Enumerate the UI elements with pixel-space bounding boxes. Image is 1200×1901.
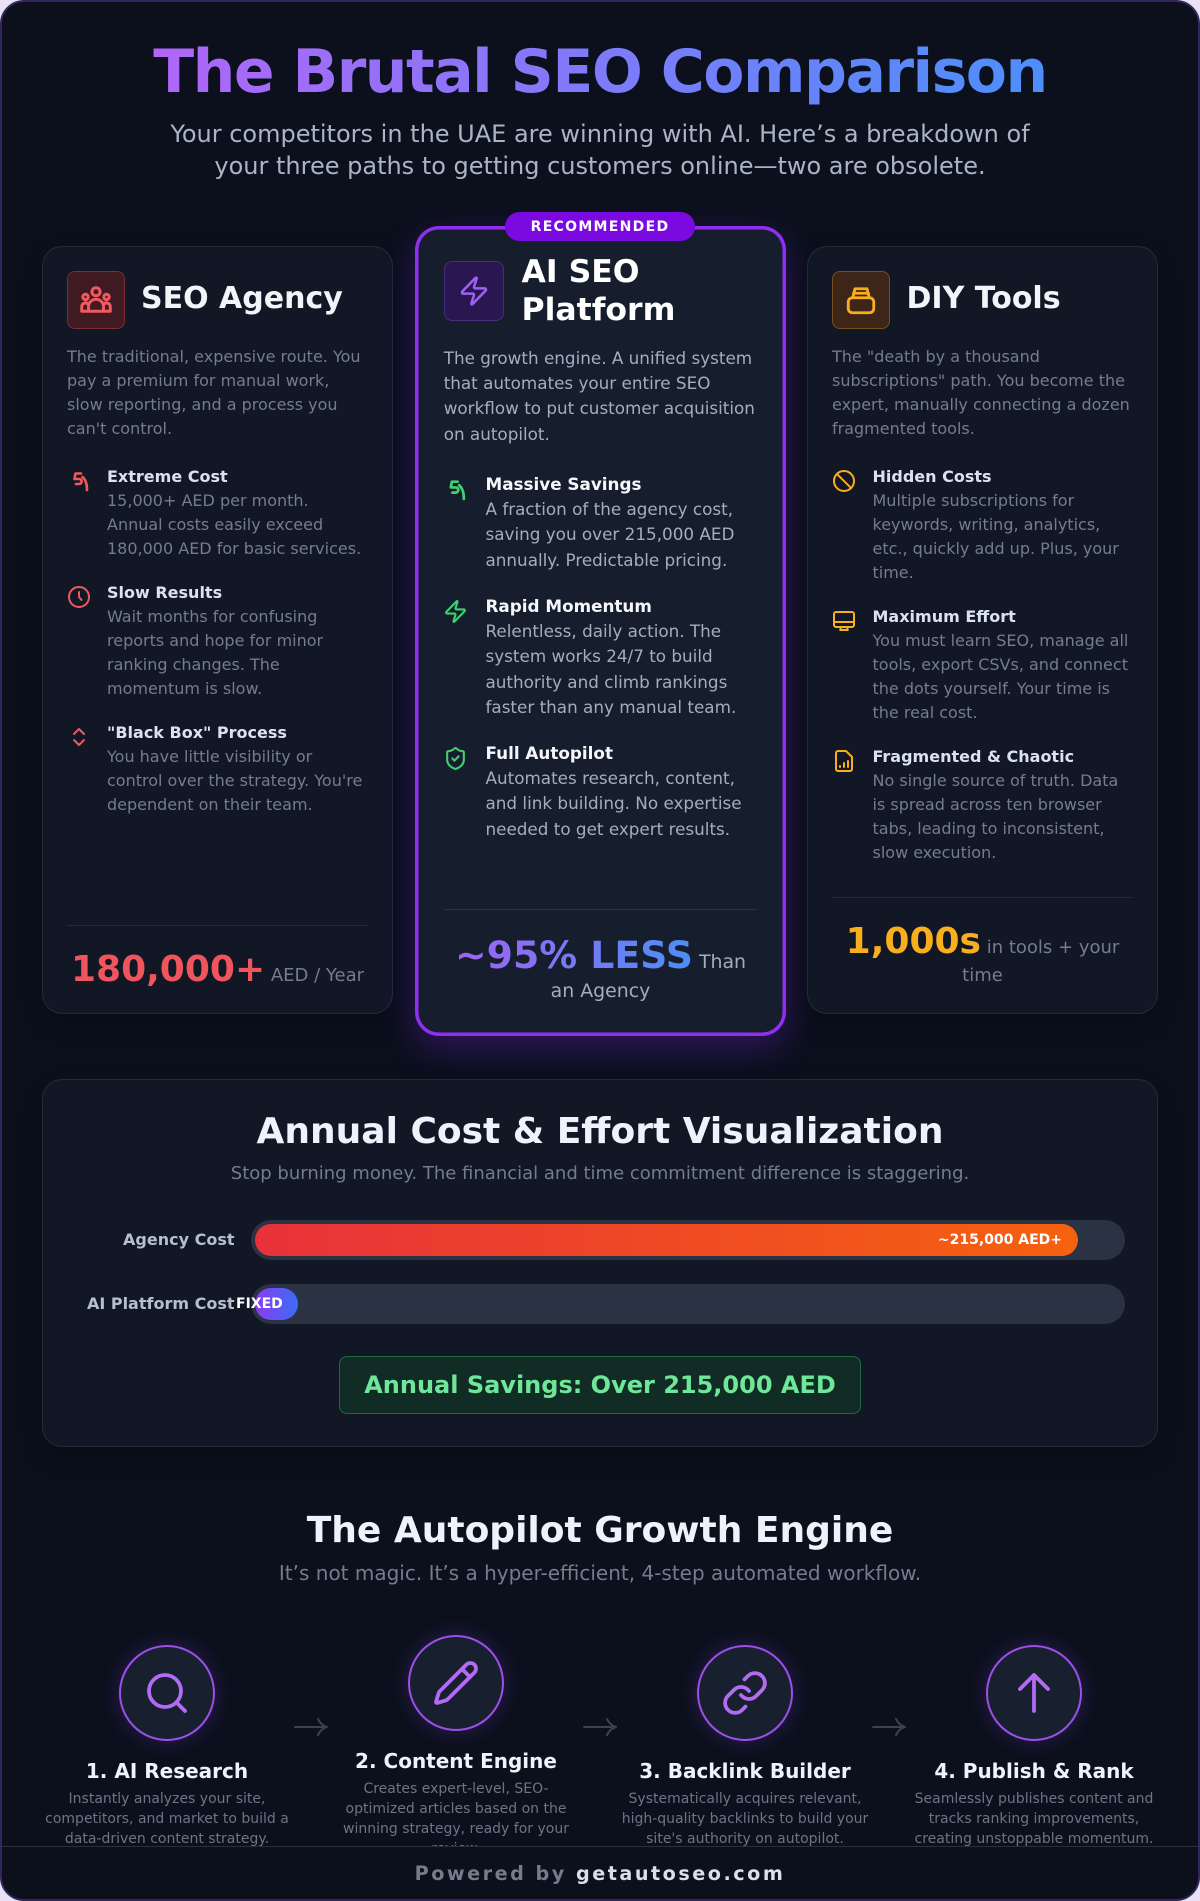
feature: extreme cost xyxy=(73,467,361,558)
panel: DIY Tools: Hidden Costs xyxy=(872,467,992,486)
panel: SEO Agency: momentum is slow. xyxy=(107,679,262,698)
panel: AI SEO Platform: faster than any manual team. xyxy=(486,697,736,717)
step description: Seamlessly publishes content and xyxy=(915,1791,1153,1807)
step 2 xyxy=(343,1626,569,1857)
label: agency cost: Agency Cost xyxy=(123,1230,234,1249)
panel: DIY Tools: the dots yourself. Your time is xyxy=(872,679,1110,698)
description: slow reporting, and a process you xyxy=(67,395,338,414)
step description: competitors, and market to build a xyxy=(45,1811,289,1827)
panel: DIY Tools: No single source of truth. Data xyxy=(872,771,1118,790)
label: AI platform cost: AI Platform Cost xyxy=(87,1294,234,1313)
panel: AI SEO Platform: authority and climb rankings xyxy=(486,672,727,692)
panel: DIY Tools: is spread across ten browser xyxy=(872,795,1102,814)
description: The "death by a thousand xyxy=(832,347,1040,366)
panel: DIY Tools: Maximum Effort xyxy=(872,607,1016,626)
description xyxy=(444,348,755,444)
description: pay a premium for manual work, xyxy=(67,371,329,390)
panel: SEO Agency: 15,000+ AED per month. xyxy=(107,491,309,510)
step description: Creates expert-level, SEO- xyxy=(363,1781,549,1797)
description: expert, manually connecting a dozen xyxy=(832,395,1130,414)
panel: SEO Agency: Extreme Cost xyxy=(107,467,228,486)
arrow xyxy=(583,1718,617,1736)
heading: DIY Tools xyxy=(906,281,1061,316)
panel: AI SEO Platform: Rapid Momentum xyxy=(486,596,652,616)
savings callout xyxy=(339,1356,861,1414)
step description xyxy=(45,1791,289,1847)
arrow xyxy=(294,1718,328,1736)
price: time xyxy=(962,964,1003,986)
panel: AI SEO Platform: needed to get expert results. xyxy=(486,819,730,839)
step description: Systematically acquires relevant, xyxy=(629,1791,861,1807)
step title: 1. AI Research xyxy=(86,1759,248,1783)
panel: AI SEO Platform: Automates research, content, xyxy=(486,768,735,788)
feature: fragmented and chaotic xyxy=(835,747,1118,862)
bar fill: agency xyxy=(255,1224,1078,1256)
subheading: growth engine: It’s not magic. It’s a hyper-efficient, 4-step automated workflow. xyxy=(279,1561,921,1585)
heading: growth engine: The Autopilot Growth Engine xyxy=(307,1510,893,1551)
bar label: fixed: FIXED xyxy=(236,1296,283,1312)
step title: 4. Publish & Rank xyxy=(934,1759,1134,1783)
panel: SEO Agency: Wait months for confusing xyxy=(107,607,317,626)
step description xyxy=(622,1791,868,1847)
step description: tracks ranking improvements, xyxy=(929,1811,1139,1827)
heading: SEO Agency xyxy=(141,281,343,316)
heading xyxy=(522,254,675,328)
icon: arrow up xyxy=(986,1645,1082,1741)
icon: people xyxy=(67,271,125,329)
subtitle xyxy=(170,120,1030,180)
badge: recommended: RECOMMENDED xyxy=(531,219,669,235)
price: an Agency xyxy=(551,980,650,1002)
feature: black box xyxy=(73,723,362,814)
heading: Platform xyxy=(522,292,675,328)
panel: annual cost visualization xyxy=(42,1079,1158,1446)
step description: high-quality backlinks to build your xyxy=(622,1811,868,1827)
price: 180,000+ AED / Year xyxy=(71,948,364,990)
step description: Instantly analyzes your site, xyxy=(69,1791,265,1807)
description: on autopilot. xyxy=(444,424,550,444)
step description: creating unstoppable momentum. xyxy=(914,1831,1154,1847)
panel: DIY Tools: etc., quickly add up. Plus, your xyxy=(872,539,1119,558)
bar: agency cost xyxy=(251,1220,1125,1260)
panel: AI SEO Platform: annually. Predictable pricing. xyxy=(486,550,727,570)
step description: data-driven content strategy. xyxy=(65,1831,269,1847)
panel: SEO Agency: dependent on their team. xyxy=(107,795,313,814)
subtitle: your three paths to getting customers online—two are obsolete. xyxy=(214,152,986,180)
panel: DIY Tools: tabs, leading to inconsistent, xyxy=(872,819,1105,838)
step 4 xyxy=(914,1636,1154,1847)
price: ~95% LESS Than xyxy=(455,933,746,977)
arrow xyxy=(872,1718,906,1736)
step description: site's authority on autopilot. xyxy=(646,1831,844,1847)
step description: optimized articles based on the xyxy=(346,1801,566,1817)
panel: AI SEO Platform: Full Autopilot xyxy=(486,743,613,763)
description: workflow to put customer acquisition xyxy=(444,398,755,418)
description: The growth engine. A unified system xyxy=(444,348,752,368)
panel: SEO Agency: "Black Box" Process xyxy=(107,723,287,742)
feature: slow results xyxy=(68,583,324,698)
savings callout: Annual Savings: Over 215,000 AED xyxy=(364,1371,836,1399)
panel: AI SEO Platform: Relentless, daily action. The xyxy=(486,621,721,641)
panel: DIY Tools: Fragmented & Chaotic xyxy=(872,747,1074,766)
description: can't control. xyxy=(67,419,172,438)
icon: link xyxy=(697,1645,793,1741)
panel: SEO Agency: Annual costs easily exceed xyxy=(107,515,323,534)
step description: winning strategy, ready for your xyxy=(343,1821,569,1837)
icon: search xyxy=(119,1645,215,1741)
panel: SEO Agency: control over the strategy. You're xyxy=(107,771,362,790)
subtitle: Your competitors in the UAE are winning with AI. Here’s a breakdown of xyxy=(170,120,1030,148)
bar fill: agency: ~215,000 AED+ xyxy=(938,1232,1062,1248)
panel: AI SEO Platform: Massive Savings xyxy=(486,474,641,494)
step 1 xyxy=(45,1636,289,1847)
step 3 xyxy=(622,1636,868,1847)
step description xyxy=(914,1791,1154,1847)
badge: recommended xyxy=(505,212,695,241)
step title: 2. Content Engine xyxy=(355,1749,557,1773)
panel: DIY Tools xyxy=(807,246,1158,1014)
feature: maximum effort xyxy=(833,607,1128,722)
icon: pencil xyxy=(408,1635,504,1731)
description: subscriptions" path. You become the xyxy=(832,371,1125,390)
heading: AI SEO xyxy=(522,254,640,290)
panel: AI SEO Platform xyxy=(415,226,786,1036)
panel: DIY Tools: slow execution. xyxy=(872,843,996,862)
icon: bolt xyxy=(444,261,504,321)
description: that automates your entire SEO xyxy=(444,373,710,393)
panel: SEO Agency: Slow Results xyxy=(107,583,222,602)
panel: SEO Agency: reports and hope for minor xyxy=(107,631,323,650)
icon: stack xyxy=(832,271,890,329)
heading: Annual Cost & Effort Visualization xyxy=(257,1110,943,1152)
panel: SEO Agency: You have little visibility or xyxy=(107,747,312,766)
title: The Brutal SEO Comparison xyxy=(153,37,1047,107)
description: The traditional, expensive route. You xyxy=(67,347,361,366)
panel: AI SEO Platform: and link building. No expertise xyxy=(486,793,742,813)
panel: DIY Tools: time. xyxy=(872,563,914,582)
feature: rapid momentum xyxy=(445,596,736,717)
step title: 3. Backlink Builder xyxy=(639,1759,851,1783)
bar: AI platform cost xyxy=(251,1284,1125,1324)
panel: DIY Tools: tools, export CSVs, and connect xyxy=(872,655,1128,674)
panel: AI SEO Platform: system works 24/7 to build xyxy=(486,646,713,666)
footer: Powered by getautoseo.com xyxy=(415,1862,785,1885)
panel: DIY Tools: You must learn SEO, manage all xyxy=(872,631,1128,650)
feature: massive savings xyxy=(450,474,734,570)
step description: review. xyxy=(431,1841,481,1857)
price xyxy=(455,933,746,1002)
description xyxy=(832,347,1130,438)
description xyxy=(66,347,361,438)
price xyxy=(846,920,1120,986)
footer xyxy=(2,1846,1198,1899)
panel: AI SEO Platform: A fraction of the agency cost, xyxy=(486,499,733,519)
panel: SEO Agency: ranking changes. The xyxy=(107,655,280,674)
description: fragmented tools. xyxy=(832,419,975,438)
panel: AI SEO Platform: saving you over 215,000 AED xyxy=(486,524,734,544)
panel: DIY Tools: Multiple subscriptions for xyxy=(872,491,1074,510)
step description xyxy=(343,1781,569,1857)
panel: SEO Agency xyxy=(42,246,393,1014)
panel: DIY Tools: the real cost. xyxy=(872,703,978,722)
price: 1,000s in tools + your xyxy=(846,920,1119,962)
subheading: Stop burning money. The financial and time commitment difference is staggering. xyxy=(231,1163,969,1184)
bar fill: AI platform xyxy=(255,1288,298,1320)
panel: SEO Agency: 180,000 AED for basic services. xyxy=(107,539,361,558)
feature: full autopilot xyxy=(446,743,742,839)
panel: DIY Tools: keywords, writing, analytics, xyxy=(872,515,1100,534)
feature: hidden costs xyxy=(833,467,1119,582)
